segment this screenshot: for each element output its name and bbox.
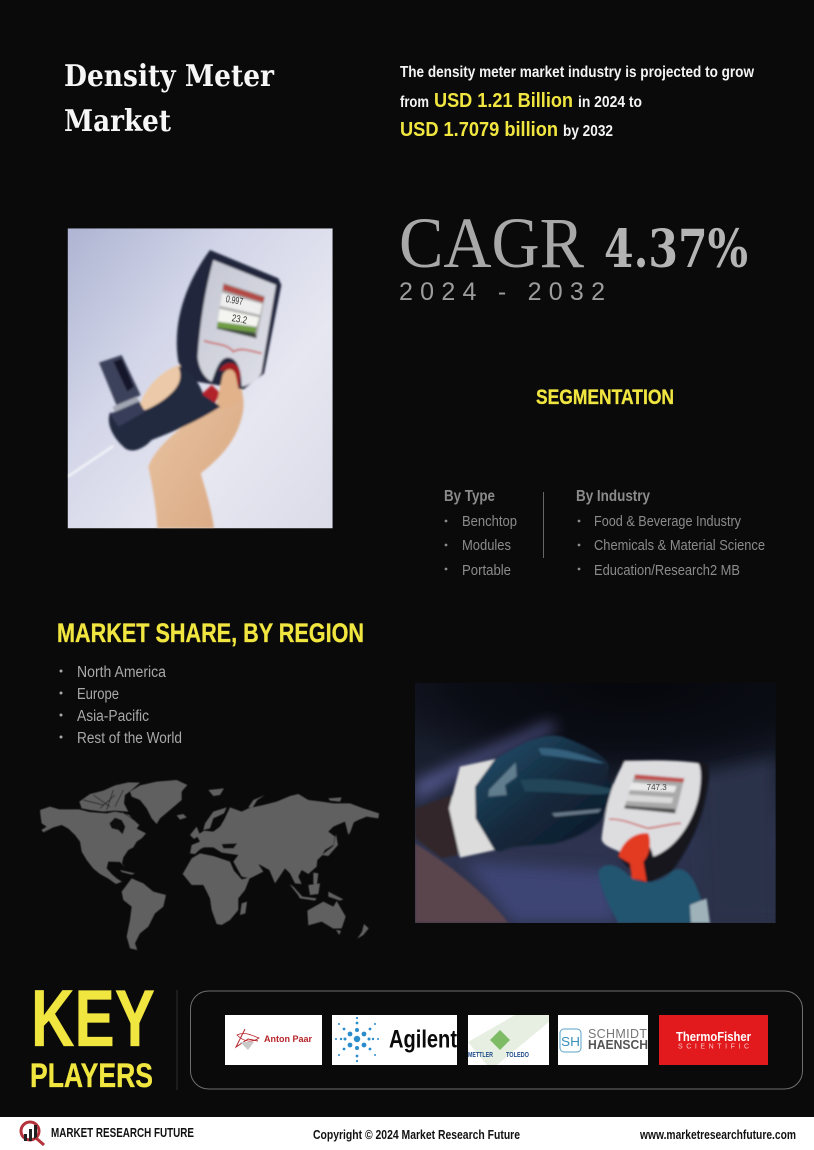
logo: Agilent: Agilent bbox=[389, 1026, 458, 1054]
sleeve bbox=[415, 795, 458, 858]
icon: market research future magnifier logo bbox=[21, 1122, 44, 1145]
CAGR figure bbox=[399, 203, 748, 306]
market size summary text: from bbox=[400, 94, 429, 111]
key players heading: KEY bbox=[31, 974, 155, 1064]
sample tube bbox=[68, 446, 113, 477]
region list: Europe bbox=[77, 686, 119, 703]
logo: Anton Paar: Anton Paar bbox=[264, 1034, 312, 1044]
screen bbox=[217, 283, 265, 338]
CAGR figure: 4.37% bbox=[604, 219, 748, 280]
handle bbox=[109, 367, 221, 451]
segmentation: by industry: Education/Research2 MB bbox=[594, 562, 740, 579]
market size summary text bbox=[400, 64, 754, 141]
market size summary text: USD 1.21 Billion bbox=[434, 90, 573, 112]
logo: Agilent bbox=[332, 1015, 458, 1065]
logo: Thermo Fisher Scientific: SCIENTIFIC bbox=[678, 1044, 749, 1050]
device face bbox=[602, 760, 701, 857]
logo: Thermo Fisher Scientific: ThermoFisher bbox=[676, 1029, 751, 1044]
lower glove bbox=[598, 865, 710, 923]
logo: Thermo Fisher Scientific bbox=[659, 1015, 768, 1065]
logo: Schmidt Haensch: HAENSCH bbox=[588, 1038, 648, 1052]
photo: handheld density meter held in hand: 23.2 bbox=[231, 313, 248, 327]
heading: market share by region: MARKET SHARE, BY REGION bbox=[57, 618, 364, 648]
red line bbox=[609, 819, 681, 828]
logo: Schmidt Haensch bbox=[558, 1015, 648, 1065]
logo: Schmidt Haensch: SCHMIDT bbox=[588, 1027, 647, 1041]
segmentation: by industry: By Industry bbox=[576, 488, 650, 505]
glove cuff bbox=[449, 759, 495, 858]
logo: Mettler Toledo: METTLER bbox=[468, 1050, 493, 1059]
segmentation: by industry: Food & Beverage Industry bbox=[594, 513, 741, 530]
logo: Mettler Toledo bbox=[468, 1015, 549, 1065]
segmentation: by type: Portable bbox=[462, 562, 511, 579]
red trigger bbox=[618, 833, 650, 882]
sensor head bbox=[99, 355, 141, 407]
segmentation: by type: Benchtop bbox=[462, 513, 517, 530]
world map bbox=[40, 780, 379, 950]
title bbox=[64, 59, 275, 139]
footer brand name: MARKET RESEARCH FUTURE bbox=[51, 1126, 194, 1140]
segmentation: by type: By Type bbox=[444, 488, 495, 505]
red trigger bbox=[219, 363, 241, 388]
title: Market bbox=[64, 104, 171, 139]
panel: key players logos bbox=[190, 991, 802, 1089]
segmentation: by type bbox=[444, 488, 517, 579]
device shell bbox=[618, 760, 709, 885]
photo: gloved hands using density meter: 747.3 bbox=[647, 782, 667, 792]
key players heading: PLAYERS bbox=[30, 1057, 153, 1095]
region list: Asia-Pacific bbox=[77, 708, 149, 725]
thumb on the trigger bbox=[217, 370, 241, 410]
heading: segmentation: SEGMENTATION bbox=[536, 386, 674, 409]
region list: Rest of the World bbox=[77, 730, 182, 747]
device face bbox=[198, 260, 276, 387]
fingers behind the handle bbox=[140, 365, 187, 412]
photo: gloved hands using density meter bbox=[415, 683, 776, 923]
device back shell bbox=[177, 250, 281, 389]
upper glove bbox=[475, 736, 622, 852]
footer bar bbox=[0, 1117, 814, 1150]
screen bbox=[624, 774, 684, 813]
red line on faceplate bbox=[204, 341, 262, 353]
segmentation: by type: Modules bbox=[462, 537, 511, 554]
logo: Anton Paar bbox=[225, 1015, 322, 1065]
photo: handheld density meter held in hand bbox=[68, 228, 333, 528]
logo: Mettler Toledo: TOLEDO bbox=[506, 1050, 529, 1059]
market size summary text: The density meter market industry is projected to grow bbox=[400, 64, 754, 81]
title: Density Meter bbox=[64, 59, 275, 94]
cuff print bbox=[488, 762, 517, 797]
logo: Schmidt Haensch: SH bbox=[561, 1034, 580, 1049]
region list: North America bbox=[77, 664, 166, 681]
key players heading bbox=[30, 974, 155, 1095]
market size summary text: USD 1.7079 billion bbox=[400, 119, 558, 141]
photo: handheld density meter held in hand: 0.997 bbox=[225, 294, 244, 308]
market size summary text: in 2024 to bbox=[578, 94, 642, 111]
market size summary text: by 2032 bbox=[563, 123, 613, 140]
segmentation: by industry bbox=[576, 488, 765, 579]
segmentation: by industry: Chemicals & Material Science bbox=[594, 537, 765, 554]
region list bbox=[60, 664, 182, 747]
footer copyright: Copyright © 2024 Market Research Future bbox=[313, 1128, 520, 1142]
CAGR figure: CAGR bbox=[399, 203, 584, 283]
CAGR figure: 2024 - 2032 bbox=[399, 278, 605, 306]
arm and palm bbox=[148, 370, 244, 528]
